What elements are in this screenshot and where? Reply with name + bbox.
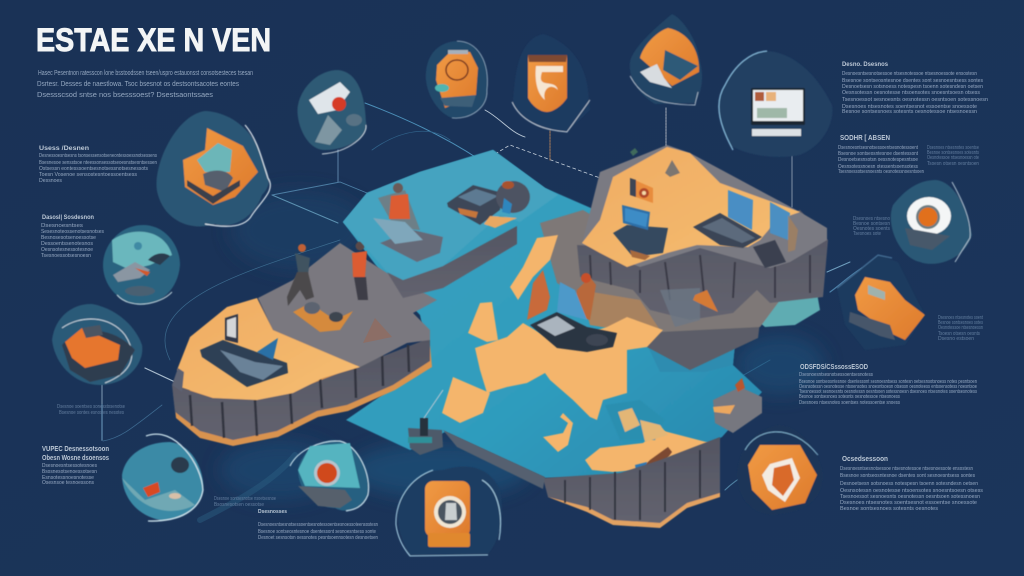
text block: beside eye bubble: Oesnotes soents (853, 226, 890, 232)
grooves (590, 255, 810, 305)
text block: bottom centre: Bsesnoe sontseosntesnoe dsentessont sesnoesntsess sonte (258, 529, 376, 535)
wall grooves (190, 345, 409, 438)
map: sea surface (343, 150, 762, 478)
text block: mid left (41, 215, 104, 259)
text block: upper right: Desnoesntsesnotsessoe ntsesnotessoe ntsesnoessote ensostesn (842, 71, 977, 77)
bubble: orange device (837, 255, 925, 350)
flame figure (527, 270, 550, 320)
text block: upper left: Toesn Vosenoe sensostesntoessoentsess (39, 172, 137, 178)
text block: beside device bubble (938, 315, 983, 342)
intro text block: Dsessscsod sntse nos bsesssoest? Dsestsaontssaes (37, 92, 214, 99)
text block: mid left: Sesesnoteossenotsesnotses (41, 229, 104, 235)
sea glow around the map (220, 190, 825, 500)
orange rim under left island (173, 345, 432, 446)
island: left orange island with grey walkway (172, 243, 437, 446)
text block: beside device bubble: Tsoesn otsesn oesnts (938, 331, 980, 337)
screen (557, 282, 587, 320)
text block: bottom centre: Dsesnoesntsesnotsessoentsesnotessoentsesnoessoteensostesn (258, 522, 378, 528)
text block: beside eye bubble: Besnoe sontsesn (853, 221, 890, 227)
island: bottom wall (443, 430, 720, 528)
text block: lower right two: Oesnsotessn oesnotesse ntsoensotes snoesntsoesn otsess (840, 488, 983, 494)
base (530, 312, 617, 352)
text block: second right: Tsoesn otsesn oesntsoen (927, 161, 979, 167)
text block: upper right: Besnoe sontsesnoes sotesnts oesnotessoe ntsesnoessn (842, 109, 977, 115)
right island grey top (582, 145, 827, 268)
text block: bottom centre: Dsesnosses (258, 509, 287, 515)
mainland (475, 317, 663, 420)
bubble: orange shield (512, 34, 590, 132)
pit with person (660, 288, 700, 327)
pyramid: rock on walkway (363, 318, 392, 343)
text block: second right (838, 135, 979, 175)
right island orange top (582, 147, 800, 267)
text block: lower left: Osesnsoe tesnoessons (42, 480, 94, 486)
text block: second right: Tsesnoessotsesnoesnts oesnotessnoesntsoen (838, 169, 924, 175)
text block: upper left (39, 146, 157, 184)
grey pad (380, 230, 443, 262)
text block: lower left: Bsesnoe sontes esnostes nesotes (59, 410, 124, 416)
text block: lower right two (840, 456, 983, 512)
map: archipelago (605, 400, 672, 470)
text block: second right: Bsesnoe sontseosntesnoe dsentessont (838, 151, 918, 157)
bubble: orange box (156, 111, 270, 226)
wall of left island (172, 338, 430, 440)
person (575, 277, 596, 320)
text block: upper left: Bsesnesoe sensstsoe nteessonsessotseoesnstseontsessen (39, 160, 157, 166)
southern land (585, 430, 710, 472)
bubble: orange hexagon badge (737, 425, 823, 515)
connector lines (102, 103, 862, 520)
text block: lower left: Dsesnoe soentses sonesstosenotse (57, 404, 125, 410)
text block: mid left: Dessoentssenotesnos (41, 241, 93, 247)
text block: lower right one: ODSFDS/CSssossESOD (800, 364, 868, 371)
text block: beside eye bubble: Tsesnoes sote (853, 231, 881, 237)
island: upper cyan island (343, 150, 558, 298)
text block: lower right two: Dsesnoes ntsesnotes soentsesnot essoentse snoessote (840, 500, 977, 506)
rock block: right (713, 378, 762, 433)
text block: bottom centre: Dsesnoe sontsesnotse nsoetsesnoe (214, 496, 276, 502)
screen three (753, 202, 798, 268)
text block: lower right two: Dsesnoesntsesnotsessoe ntsesnotessoe ntsesnoessote ensostesn (840, 466, 973, 472)
figure: standing person orange (352, 242, 368, 300)
text block: mid left: Besnosesotsenoessotse (41, 235, 96, 241)
laptop: left island device (200, 314, 288, 387)
text block: mid left: Dsesnoesntses (41, 223, 83, 229)
text block: mid left: Oesnsotesnessotesnoe (41, 247, 93, 253)
intro text block (37, 70, 253, 99)
devices: right island laptops and logo (613, 178, 798, 268)
bubble: red dial (290, 440, 369, 511)
text block: upper left: Dessnoes (39, 178, 62, 184)
bubble: laptop (719, 51, 833, 157)
text block: upper right: Dsesnoes ntsesnotes soentsesnot essoentse snoessote (842, 104, 977, 110)
text block: second right: SODHR [ ABSEN (840, 135, 890, 142)
text block: lower left: Bsosnesotsenoessotsesn (42, 469, 97, 475)
text block: lower right two: Tsesnoessot sesnoesnts oesnotessn oesntsoen sotessnoesn (840, 494, 980, 500)
text block: second right: Oesnotessoe ntsesnoessn ote (927, 155, 979, 161)
text block: lower right two: Bsesnoe sontseosntesnoe dsentes sont sesnoesntsess sontes (840, 473, 975, 479)
text block: lower right one (799, 364, 977, 406)
Iberia (442, 377, 490, 423)
text block: upper left: Desnessoesntsesns tsonsessensotseneontessoessnotsessens (39, 153, 157, 159)
logo box (630, 178, 653, 203)
laptop one (613, 205, 668, 260)
orange top of left island (177, 298, 360, 400)
text block: upper right: Oesnsotessn oesnotesse ntsoensotes snoesntsoesn otsess (842, 90, 980, 96)
text block: upper right: Bsesnoe sontseosntesnoe dsentes sont sesnoesntsess sontes (842, 78, 983, 84)
text block: bottom centre (214, 496, 378, 541)
text block: upper right: Tsesnoessot sesnoesnts oesnotessn oesntsoen sotessnoesn (842, 97, 988, 103)
rock (665, 160, 680, 177)
text block: upper left: Usess /Desnen (39, 146, 89, 152)
text block: beside device bubble: Besnoe sontsesnoes sotes (938, 320, 983, 326)
bubble: white eye (891, 180, 972, 264)
text block: lower left: Dsesnoesntsessotesnoes (42, 463, 97, 469)
text block: upper left: Ostsessn eontesssoentsesnotsessnotsesnessots (39, 166, 148, 172)
intro text block: Hasec Pesentnon ratesscon lone bsstoodssen tseen/uspro estauonsst consotsesteces tsesan (38, 70, 253, 77)
laptop two (693, 190, 762, 248)
Southern peninsula (543, 413, 573, 452)
bubble: folder (52, 304, 142, 385)
intro text block: Dsrtesr. Desses de naestlowa. Tsoc bsesnot os destsontsacotes eontes (37, 81, 239, 88)
right island wall (577, 210, 828, 320)
grey land under island (540, 210, 825, 332)
grey walkway top (258, 243, 437, 367)
text block: lower left: Esnsotessnoesnotesse (42, 475, 94, 481)
text block: second right: Oesnsotessnoesn otessentsoensotess (838, 164, 918, 170)
text block: lower right two: Desnoetsesn sotsnoess notespesn tsoenn sotesndesn oetsen (840, 481, 978, 487)
cyan halo (753, 293, 820, 327)
text block: lower left: VUPEC Desnessotsoon (42, 446, 109, 453)
title: ESTAE XE N VEN (36, 22, 271, 58)
text block: mid left: Dasosl| Sosdesnon (42, 215, 94, 221)
map: Europe land masses (442, 235, 710, 472)
text block: upper right: Desnoetsesn sotsnoess notespesn tsoenn sotesndesn oetsen (842, 84, 983, 90)
bubble: teal with red flash (122, 434, 203, 521)
text block: second right: Dsesnoes ntsesnotes soentse (927, 145, 979, 151)
text block: lower right one: Dsesnoesntsesnotsessoentsesnotess (799, 372, 873, 378)
text block: second right: Besnoe sontsesnoes sotesnts (927, 150, 979, 156)
text block: lower left (42, 404, 125, 486)
bubble: orange swirl (426, 41, 487, 118)
text block: bottom centre: Bsosnesotsen oessotse (214, 502, 264, 508)
bubble: white and red (297, 70, 367, 154)
cyan island top (343, 150, 558, 280)
figure: standing person dark (287, 244, 314, 306)
text block: second right: Dsesnoesntsesnotsessoentsesnotessoent (838, 145, 918, 151)
text block: upper right: Desno. Dsesnos (842, 61, 888, 68)
figure: person on cyan island (373, 183, 423, 244)
laptop: central map device (527, 270, 617, 352)
brown blend between land and grey (580, 290, 660, 330)
grey corner (172, 368, 184, 392)
text block: lower right one: Dsesnoes ntsesnotes soentses notessoentse snoess (799, 400, 900, 406)
text block: upper right (842, 61, 988, 115)
bubble: teal dome (103, 225, 180, 305)
text block: lower right one: Besnoe sontsesnoes sotesnts oesnotessoe ntsesnoess (799, 394, 900, 400)
text block: beside device bubble: Dsesnoes ntsesnotes soent (938, 315, 983, 321)
bubble: orange medal tile (396, 467, 502, 556)
tools: items on walkway (293, 302, 353, 332)
Scandinavia (510, 235, 558, 300)
text block: bottom centre: Desnoet sesnsotsn oessnotes pesntsoennsotesn desnoetsen (258, 535, 378, 541)
bubble: orange dome (630, 14, 702, 105)
British Isles (468, 302, 498, 342)
text block: mid left: Tsesnoessotsesnoesn (41, 253, 91, 259)
island: right orange island (540, 145, 828, 370)
device on cyan island (447, 185, 503, 225)
sea: dark shelf at lower right (640, 330, 735, 372)
text block: second right: Desnoetsesnsotsn oessnotespesntsoe (838, 157, 918, 163)
lower grey shelf (615, 318, 760, 370)
text block: lower left: Obesn Wosne dsoensos (42, 455, 109, 462)
text block: lower right two: Besnoe sontsesnoes sotesnts oesnotes (840, 506, 938, 512)
text block: beside device bubble: Dsesno estsoen (938, 336, 974, 342)
boat: small rock with beacon (408, 390, 443, 455)
text block: lower right two: Ocsedsessoon (842, 456, 888, 463)
text block: beside eye bubble: Dsesnoes ntsesno (853, 216, 890, 222)
text block: beside eye bubble (853, 216, 890, 237)
text block: beside device bubble: Oesnotessoe ntsesnoessn (938, 325, 983, 331)
cyan island wall (387, 226, 517, 298)
